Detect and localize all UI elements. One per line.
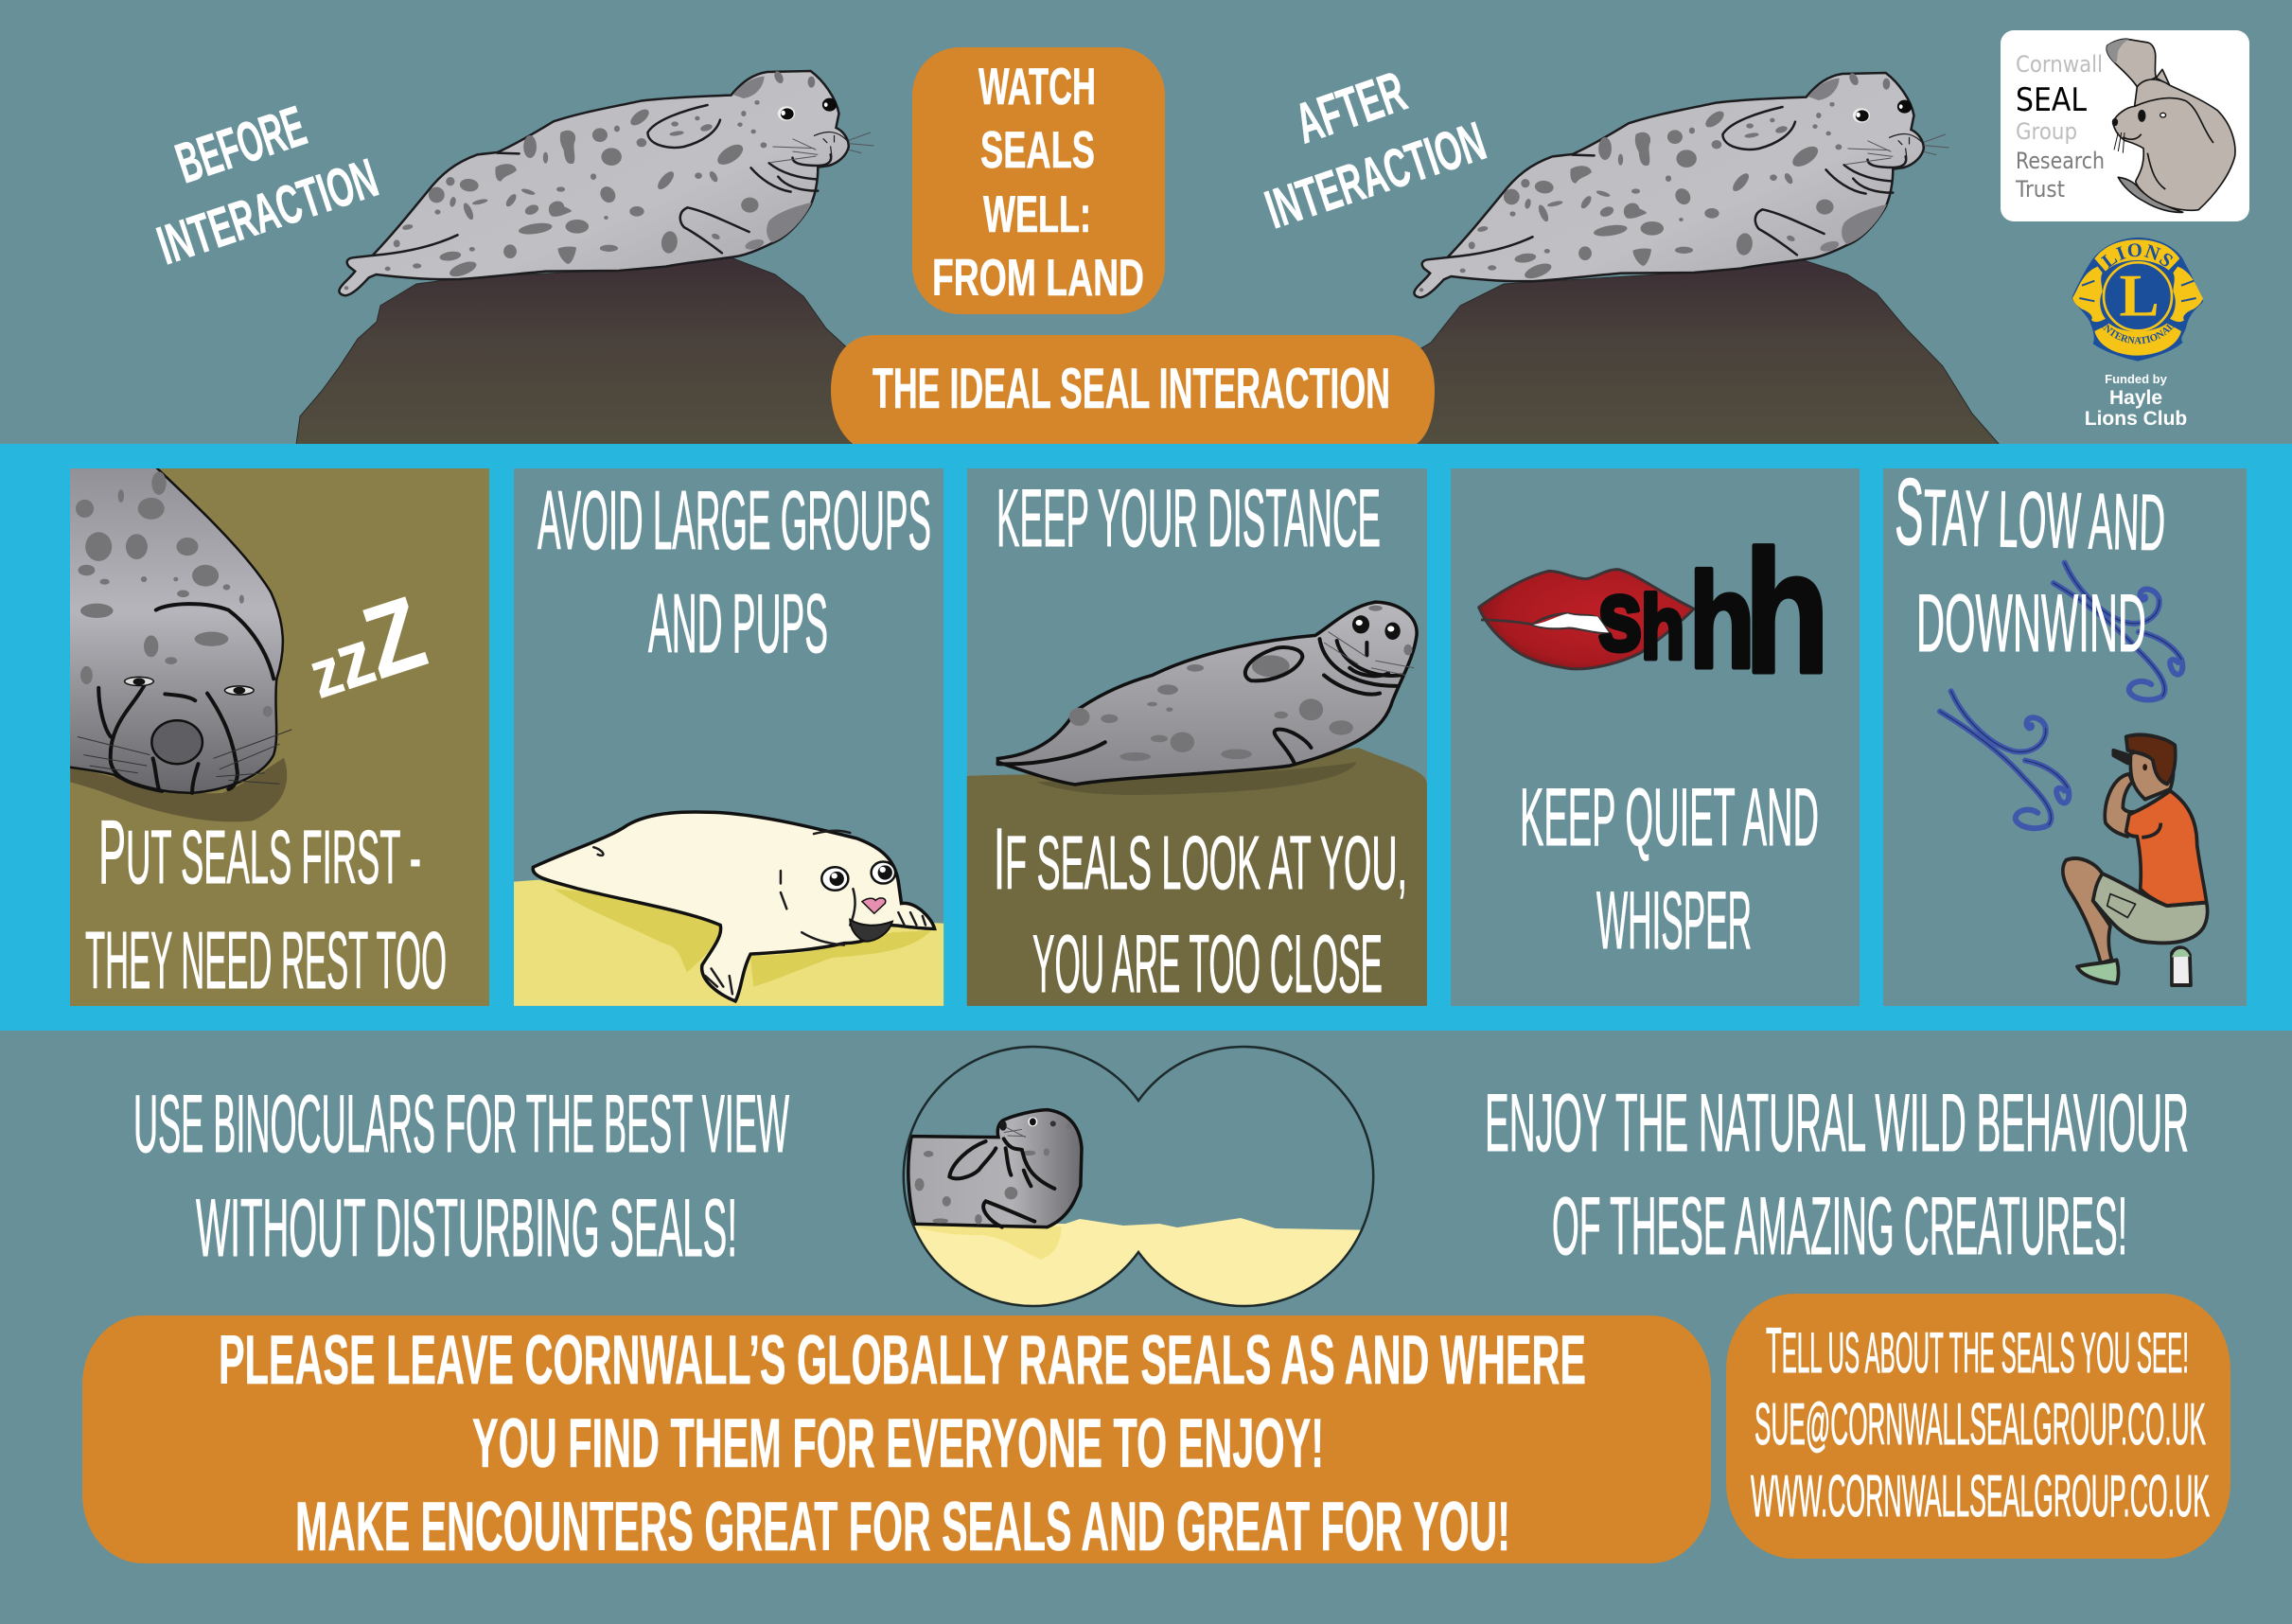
shhh: s (1597, 558, 1643, 672)
label: before interaction (150, 94, 385, 276)
callout: watch seals well from land: FROM LAND (932, 248, 1144, 307)
illustration: alert seal on rock (967, 602, 1427, 1006)
shhh: h (1689, 546, 1755, 697)
text: funded by Hayle Lions Club: Funded by (2105, 372, 2168, 386)
logo: Lions International: L (2120, 262, 2160, 328)
text: funded by Hayle Lions Club (2085, 372, 2187, 430)
panel: keep your distance (967, 468, 1427, 1010)
logo: Cornwall Seal Group Research Trust: SEAL (2016, 81, 2087, 119)
text: funded by Hayle Lions Club: Lions Club (2085, 408, 2187, 430)
illustration: seal pup on sand (514, 812, 943, 1006)
panel: stay low and downwind (1883, 459, 2247, 1006)
panel: keep your distance: IF SEALS LOOK AT YOU, (994, 811, 1407, 908)
text: KEEP YOUR DISTANCE (996, 473, 1381, 564)
text: USE BINOCULARS FOR THE BEST VIEW (133, 1079, 789, 1170)
text: WITHOUT DISTURBING SEALS! (196, 1183, 737, 1274)
title: the ideal seal interaction (831, 335, 1435, 447)
logo: Cornwall Seal Group Research Trust: Group (2016, 118, 2077, 145)
panel: avoid large groups and pups: AND PUPS (648, 576, 828, 670)
panel: keep quiet and whisper (1451, 468, 1860, 1006)
illustration: wind swirls (1940, 563, 2182, 828)
zzZ: zzZ (291, 574, 437, 719)
rock under before seal (296, 257, 852, 445)
text: use binoculars (133, 1079, 789, 1274)
shhh: h (1744, 515, 1829, 710)
panel: put seals first (60, 462, 489, 1006)
text: AVOID LARGE GROUPS (538, 473, 931, 567)
logo: Cornwall Seal Group Research Trust (2001, 30, 2249, 221)
logo: Cornwall Seal Group Research Trust: Cornwall (2016, 51, 2103, 78)
text: THEY NEED REST TOO (85, 916, 447, 1006)
illustration: crouching person (2063, 734, 2208, 985)
panel: put seals first: PUT SEALS FIRST - (98, 802, 421, 903)
text: YOU ARE TOO CLOSE (1032, 919, 1383, 1010)
illustration: seal after interaction (1414, 72, 1949, 297)
panel: avoid large groups and pups (514, 468, 943, 1006)
illustration: lips (1479, 570, 1694, 669)
callout: watch seals well from land: WELL: (983, 185, 1091, 243)
illustration: binocular view of seal (899, 1041, 1382, 1315)
callout: please leave seals (82, 1315, 1711, 1565)
logo: Lions International: INTERNATIONAL (2102, 324, 2175, 344)
callout: watch seals well from land: SEALS (980, 120, 1095, 179)
panel: keep quiet and whisper: KEEP QUIET AND (1520, 772, 1819, 863)
logo: Lions International (2072, 238, 2203, 362)
label: before interaction: INTERACTION (150, 147, 385, 276)
rock under after seal (1410, 260, 2000, 445)
callout: watch seals well from land: WATCH (979, 57, 1096, 115)
text: funded by Hayle Lions Club: Hayle (2109, 387, 2162, 409)
label: after interaction: AFTER (1287, 60, 1414, 155)
blue band (0, 444, 2292, 1031)
logo: Cornwall Seal Group Research Trust: Research (2016, 148, 2105, 174)
callout: watch seals well from land (912, 47, 1165, 314)
logo: Lions International: LIONS (2101, 243, 2173, 269)
text: enjoy the natural wild behaviour (1485, 1078, 2189, 1272)
illustration: sleeping seal (60, 462, 291, 821)
logo: Cornwall Seal Group Research Trust: Trust (2015, 176, 2065, 203)
shhh: h (1641, 577, 1685, 679)
label: after interaction (1259, 60, 1493, 240)
label: before interaction: BEFORE (168, 94, 313, 195)
panel: keep quiet and whisper: WHISPER (1596, 875, 1752, 966)
callout: please leave seals: YOU FIND THEM FOR EVERYONE TO ENJOY! (472, 1405, 1324, 1482)
label: after interaction: INTERACTION (1259, 111, 1493, 240)
illustration: seal before interaction (339, 70, 874, 295)
title: the ideal seal interaction: THE IDEAL SEAL INTERACTION (873, 357, 1390, 420)
callout: contact details (1726, 1294, 2230, 1559)
icon: waving seal (2107, 39, 2235, 212)
